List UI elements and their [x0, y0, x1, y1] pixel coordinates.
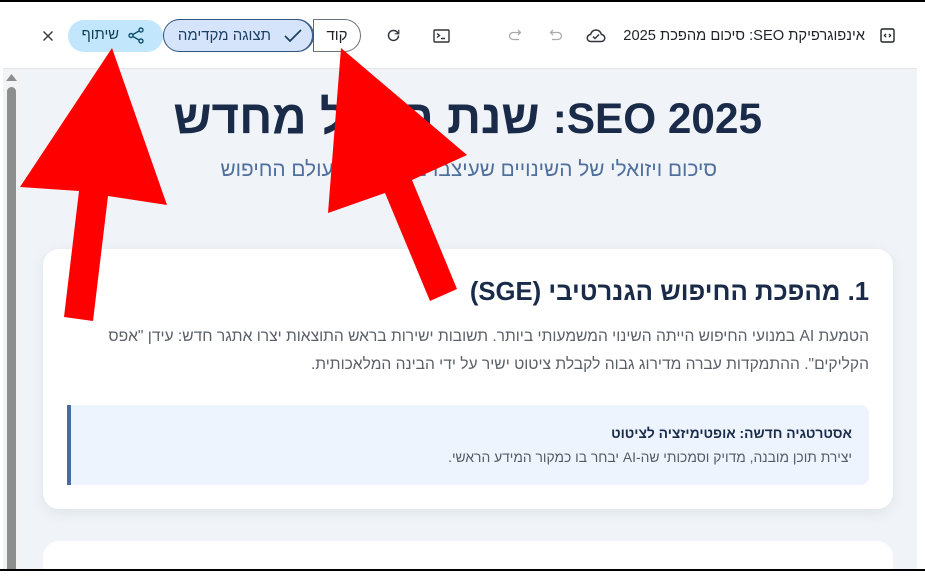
- callout text: יצירת תוכן מובנה, מדויק וסמכותי שה-AI יבחר בו כמקור המידע הראשי.: [448, 449, 852, 465]
- scrollbar: [3, 69, 20, 569]
- bottom frame bar: [0, 569, 925, 571]
- toggle: code: קוד: [326, 27, 348, 44]
- icon: cloud saved: [586, 29, 606, 42]
- icon: share: [128, 27, 144, 44]
- icon: undo: [550, 30, 562, 40]
- icon: refresh: [388, 30, 400, 42]
- callout heading: אסטרטגיה חדשה: אופטימיזציה לציטוט: [611, 425, 852, 441]
- toolbar title: אינפוגרפיקת SEO: סיכום מהפכת 2025: [623, 28, 865, 44]
- preview label: תצוגה מקדימה: [178, 27, 271, 44]
- page title: SEO 2025: שנת הכיול מחדש: [173, 91, 762, 144]
- icon: close: [43, 31, 53, 41]
- toggle: code: [313, 19, 361, 52]
- callout: new strategy: [67, 405, 869, 485]
- section heading: 1. מהפכת החיפוש הגנרטיבי (SGE): [470, 278, 869, 306]
- card: section 2 top edge: [43, 541, 893, 581]
- scroll up arrow: [6, 74, 17, 81]
- toggle: preview: [163, 19, 314, 52]
- scroll thumb: [7, 87, 16, 569]
- section body text: הטמעת AI במנועי החיפוש הייתה השינוי המשמעותי ביותר. תשובות ישירות בראש התוצאות יצרו אתגר חדש: עידן "אפס הקליקים". ההתמקדות עברה מדירוג גבוה לקבלת ציטוט ישיר על ידי הבינה המלאכותית.: [108, 328, 869, 373]
- share button: [68, 20, 163, 52]
- top frame bar: [0, 0, 925, 2]
- icon: terminal: [433, 29, 450, 43]
- share label: שיתוף: [82, 27, 119, 43]
- card: section 1: [43, 249, 893, 509]
- icon: code file: [880, 28, 895, 43]
- icon: redo: [508, 30, 522, 40]
- subtitle: סיכום ויזואלי של השינויים שעיצבו מחדש את עולם החיפוש: [220, 158, 717, 181]
- toolbar: [43, 19, 895, 52]
- icon: check: [284, 29, 302, 42]
